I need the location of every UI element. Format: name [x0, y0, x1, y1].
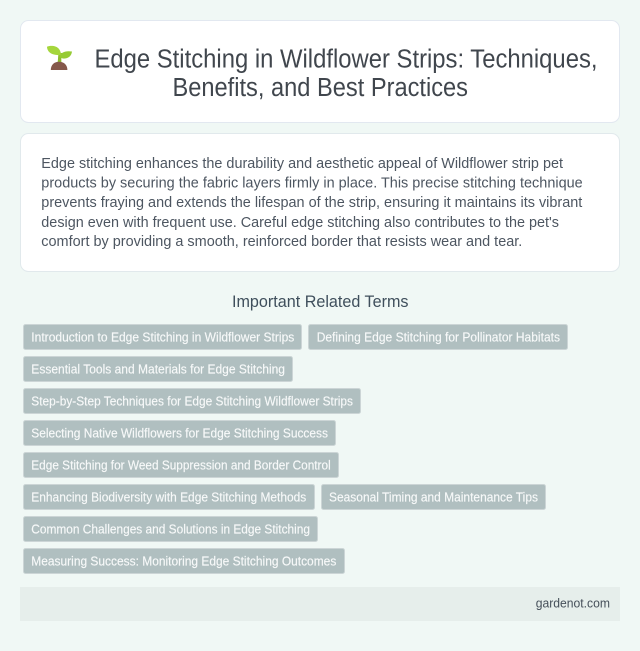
panel: related terms tags	[24, 324, 568, 574]
tag: step-by-step	[24, 388, 360, 414]
tag: biodiversity	[24, 484, 314, 510]
title: Edge Stitching in Wildflower Strips: Techniques,	[94, 46, 598, 74]
title	[94, 46, 598, 102]
footer: gardenot.com	[536, 597, 610, 611]
panel: title card	[20, 20, 620, 122]
tag: seasonal timing: Seasonal Timing and Maintenance Tips	[329, 491, 538, 505]
text block: description paragraph	[41, 156, 583, 250]
tag: seasonal timing	[322, 484, 546, 510]
tag: biodiversity: Enhancing Biodiversity with Edge Stitching Methods	[31, 491, 306, 505]
tag: step-by-step: Step-by-Step Techniques for Edge Stitching Wildflower Strips	[31, 395, 353, 409]
panel: description	[20, 134, 620, 272]
tag: tools and materials: Essential Tools and Materials for Edge Stitching	[31, 363, 285, 377]
tag: measuring success	[24, 548, 344, 574]
tag: weed suppression: Edge Stitching for Weed Suppression and Border Control	[31, 459, 331, 473]
tag: weed suppression	[24, 452, 338, 478]
icon: seedling	[47, 46, 72, 70]
text block: description paragraph: products by securing the fabric layers firmly in place. This precise stitching technique	[41, 176, 583, 192]
tag: defining: Defining Edge Stitching for Pollinator Habitats	[317, 331, 560, 345]
text block: description paragraph: design even with frequent use. Careful edge stitching also contributes to the pet's	[41, 215, 559, 231]
title: Benefits, and Best Practices	[172, 74, 468, 102]
tag: common challenges: Common Challenges and Solutions in Edge Stitching	[31, 523, 310, 537]
tag: native wildflowers	[24, 420, 336, 446]
tag: native wildflowers: Selecting Native Wildflowers for Edge Stitching Success	[31, 427, 328, 441]
text block: description paragraph: comfort by providing a smooth, reinforced border that resists wear and tear.	[41, 234, 522, 250]
text block: description paragraph: Edge stitching enhances the durability and aesthetic appeal of Wildflower strip pet	[41, 156, 563, 172]
tag: common challenges	[24, 516, 318, 542]
tag: introduction: Introduction to Edge Stitching in Wildflower Strips	[31, 331, 294, 345]
tag: tools and materials	[24, 356, 292, 382]
tag: defining	[308, 324, 568, 350]
tag: introduction	[24, 324, 302, 350]
heading: important related terms: Important Related Terms	[232, 293, 408, 311]
text block: description paragraph: prevents fraying and extends the lifespan of the strip, ensuring it maintains its vibrant	[41, 195, 582, 211]
tag: measuring success: Measuring Success: Monitoring Edge Stitching Outcomes	[31, 555, 336, 569]
footer	[20, 587, 620, 621]
